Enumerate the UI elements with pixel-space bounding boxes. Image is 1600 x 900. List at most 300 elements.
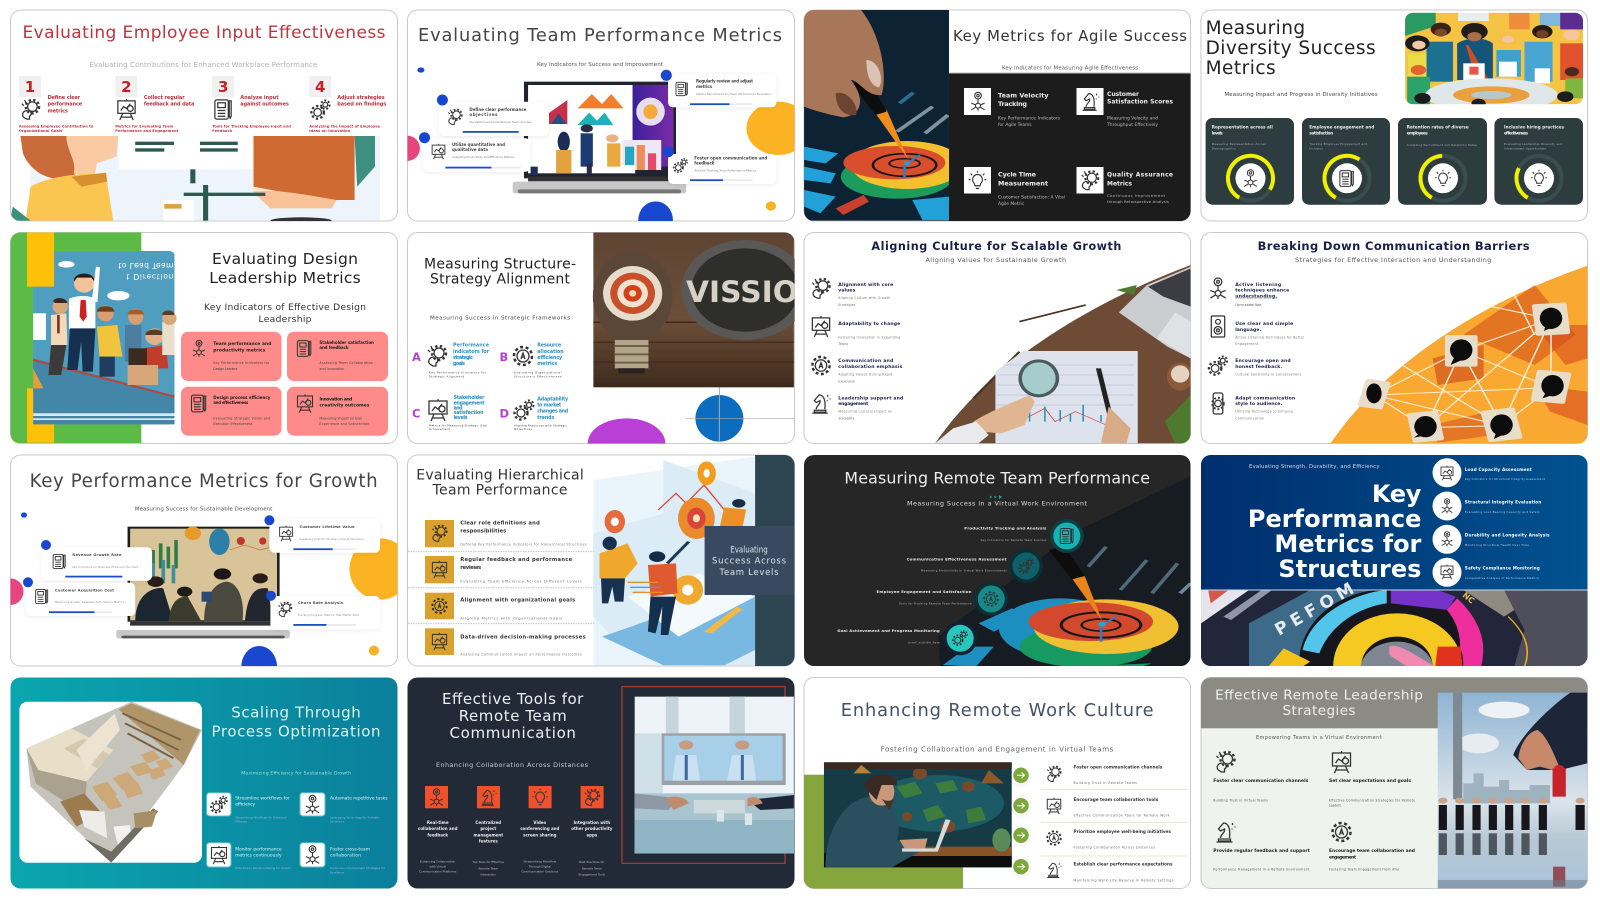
metric card: feedback bbox=[663, 146, 776, 184]
metric: Cycle Time Measurement: Customer Satisfaction: A Vital bbox=[998, 194, 1065, 200]
title bbox=[1248, 480, 1422, 583]
item: monitor bbox=[207, 843, 291, 870]
slide: Evaluating Hierarchical Team Performance bbox=[408, 450, 801, 670]
item: communication channels bbox=[1213, 752, 1309, 802]
KPI card: retention: Analyzing Recruitment and Retention Rates bbox=[1407, 143, 1477, 147]
item C: C bbox=[412, 406, 420, 420]
photo: desk with chart and magnifier, curved mask bbox=[935, 265, 1193, 443]
row: role definitions: Clear role definitions and bbox=[460, 520, 540, 526]
metric card: feedback: Tools for Tracking Team Performance Metrics bbox=[693, 168, 757, 172]
item: adapt style: Communication bbox=[1235, 417, 1264, 421]
metric card: Churn Rate Analysis bbox=[266, 591, 380, 629]
KPI card: representation: levels bbox=[1212, 130, 1223, 135]
item: communication channels: Building Trust in Virtual Teams bbox=[1213, 798, 1268, 802]
row: feedback: Regular feedback and performance bbox=[460, 557, 573, 563]
metric card: review: metrics bbox=[696, 84, 713, 89]
tool: project management: project bbox=[480, 826, 496, 831]
metric card: Customer Lifetime Value: Customer Lifetime Value bbox=[300, 525, 355, 529]
tool: real-time: feedback bbox=[427, 832, 448, 837]
item B: metrics bbox=[537, 361, 557, 367]
item C: Metrics for Measuring Strategic Goal bbox=[429, 423, 487, 427]
item: active listening bbox=[1210, 278, 1289, 307]
subtitle: Measuring Impact and Progress in Diversity Initiatives bbox=[1224, 92, 1378, 98]
tool: integration bbox=[571, 786, 613, 876]
metric card: feedback: Foster open communication and bbox=[694, 155, 767, 160]
metric: communication: Communication Effectiveness Assessment bbox=[907, 556, 1007, 562]
item B: Resource bbox=[537, 342, 562, 348]
item D: Objectives bbox=[514, 427, 533, 431]
metric card: Customer Acquisition Cost: Measuring Growth: Essential Performance Metrics bbox=[55, 600, 125, 604]
card: innovation: Experience and Satisfaction bbox=[319, 422, 369, 426]
item: open feedback: honest feedback. bbox=[1235, 364, 1282, 370]
item: clear language: Active Listening Techniques for Better bbox=[1235, 335, 1305, 339]
step 4: Analyzing the Impact of Employee bbox=[309, 124, 381, 128]
row: data-driven bbox=[425, 628, 586, 656]
green block and photo: man at laptop bbox=[804, 762, 1012, 889]
row: well-being: Fostering Collaboration Across Distances bbox=[1074, 846, 1155, 850]
item: feedback: Performance Management in a Remote Environment bbox=[1213, 868, 1310, 872]
metric card: objectives: objectives bbox=[469, 112, 498, 117]
step 4: Ideas on Innovation bbox=[309, 129, 351, 133]
item B: efficiency bbox=[537, 355, 563, 361]
title bbox=[416, 468, 584, 498]
slide: Effective Remote Leadership Strategies bbox=[1201, 678, 1588, 889]
slide: Measuring Diversity Success Metrics bbox=[1201, 10, 1588, 221]
card: stakeholder satisfaction: and Innovation bbox=[319, 367, 344, 371]
item: core values: Strategies bbox=[838, 303, 856, 307]
item C: satisfaction bbox=[454, 410, 484, 416]
tool: video conferencing: Video bbox=[533, 820, 546, 825]
item C: levels bbox=[454, 415, 468, 421]
tool: video conferencing bbox=[520, 786, 560, 874]
step 1: 1 bbox=[25, 78, 35, 96]
decorative shapes and laptop illustration bbox=[408, 67, 794, 221]
item D bbox=[500, 396, 569, 431]
slide: Aligning Culture for Scalable Growth bbox=[804, 232, 1193, 444]
metric card: objectives: Define clear performance bbox=[469, 107, 527, 112]
tool: project management: Centralized bbox=[475, 820, 501, 825]
callout: team levels: Success Across bbox=[712, 556, 787, 566]
item: adapt style bbox=[1212, 393, 1295, 421]
metric card: Customer Acquisition Cost bbox=[23, 577, 135, 616]
row: alignment bbox=[425, 593, 575, 620]
metric card: data: Utilize quantitative and bbox=[452, 142, 505, 147]
metric: load capacity: Load Capacity Assessment bbox=[1465, 467, 1532, 472]
metric: structural integrity bbox=[1432, 492, 1541, 520]
item: core values: Alignment with core bbox=[838, 282, 893, 288]
item: cross-team: Foster cross-team bbox=[330, 846, 370, 852]
row: communication channels: Foster open communication channels bbox=[1074, 764, 1163, 769]
item: automate bbox=[300, 793, 388, 823]
metric: communication bbox=[907, 549, 1043, 583]
item A: Performance bbox=[453, 342, 490, 348]
metric: durability bbox=[1432, 525, 1550, 554]
item: active listening: Active listening bbox=[1235, 282, 1281, 288]
item: active listening: understanding. bbox=[1235, 293, 1277, 299]
row: well-being: Prioritize employee well-being initiatives bbox=[1074, 829, 1172, 834]
item: communication: collaboration emphasis bbox=[838, 364, 903, 370]
title: Breaking Down Communication Barriers bbox=[1258, 239, 1530, 253]
subtitle: Strategies for Effective Interaction and Understanding bbox=[1295, 256, 1491, 264]
row: performance expectations bbox=[1012, 858, 1174, 882]
title bbox=[1215, 688, 1423, 719]
metric: Customer Satisfaction Scores: Throughput Effectively bbox=[1106, 122, 1158, 128]
metric: goals bbox=[837, 621, 977, 655]
metric: durability: Durability and Longevity Analysis bbox=[1465, 532, 1550, 538]
item: automate: Leveraging Technology for Scalable bbox=[330, 815, 379, 819]
metric: engagement bbox=[876, 582, 1008, 616]
metric: Quality Assurance Metrics: Metrics bbox=[1107, 180, 1132, 187]
item: active listening: Communication Styles bbox=[1235, 303, 1262, 307]
metric: Quality Assurance Metrics bbox=[1076, 167, 1173, 204]
slide: Enhancing Remote Work Culture bbox=[804, 678, 1190, 889]
illustration: employee and document bbox=[10, 136, 380, 224]
step 3: Feedback bbox=[212, 129, 233, 133]
row: well-being bbox=[1012, 827, 1172, 850]
card: innovation: Measuring Impact on User bbox=[319, 416, 363, 420]
title: Performance bbox=[1248, 505, 1421, 533]
KPI card: representation: Representation across all bbox=[1212, 124, 1273, 129]
subtitle: Fostering Collaboration and Engagement in Virtual Teams bbox=[881, 744, 1114, 754]
header band and photo: hand moving figure bbox=[1201, 678, 1588, 889]
tool: video conferencing: conferencing and bbox=[520, 826, 560, 831]
metric card: objectives bbox=[437, 94, 549, 136]
metric: structural integrity: Structural Integrity Evaluation bbox=[1465, 500, 1541, 504]
metric: productivity bbox=[964, 519, 1084, 553]
photo: video conference room with red frame bbox=[622, 687, 794, 863]
item A bbox=[412, 342, 490, 378]
item A: goals bbox=[453, 361, 465, 367]
subtitle: Enhancing Collaboration Across Distances bbox=[436, 761, 589, 769]
carousel marks bbox=[990, 495, 1002, 499]
KPI card: engagement: satisfaction bbox=[1309, 130, 1333, 135]
item: active listening: Understanding Diverse bbox=[1235, 296, 1277, 300]
step 2: feedback and data bbox=[144, 102, 194, 108]
subtitle: Leadership bbox=[258, 314, 312, 325]
tool: project management bbox=[472, 786, 504, 876]
item: expectations: Set clear expectations and goals bbox=[1329, 778, 1411, 784]
image: warehouse isometric bbox=[19, 702, 202, 863]
metric card: data bbox=[419, 132, 530, 172]
card: innovation bbox=[287, 387, 388, 436]
row: collaboration tools: Encourage team collaboration tools bbox=[1074, 797, 1159, 802]
item D: Aligning Resources with Strategic bbox=[514, 423, 567, 427]
tool: real-time: Real-time bbox=[427, 820, 449, 825]
slide: Evaluating Employee Input Effectiveness bbox=[10, 10, 397, 224]
metric: Team Velocity Tracking: Tracking bbox=[998, 100, 1027, 108]
item: core values bbox=[812, 279, 893, 307]
KPI card: engagement: Inclusion bbox=[1309, 146, 1323, 150]
item: cross-team bbox=[300, 843, 386, 874]
step 3 bbox=[212, 76, 291, 133]
mirrored poster text bbox=[118, 263, 173, 280]
title: Key Metrics for Agile Success bbox=[953, 28, 1187, 45]
metric: durability: Monitoring Structural Health Over Time bbox=[1465, 543, 1529, 547]
row: feedback bbox=[425, 556, 582, 584]
KPI card: retention: employees bbox=[1407, 130, 1428, 135]
metric: Team Velocity Tracking bbox=[964, 88, 1061, 128]
callout: team levels bbox=[712, 545, 787, 578]
KPI card: engagement: Tracking Employee Engagement and bbox=[1308, 142, 1367, 146]
metric card: Customer Acquisition Cost: Customer Acquisition Cost bbox=[55, 588, 114, 592]
title bbox=[1206, 18, 1376, 79]
title: Team Performance bbox=[432, 482, 568, 498]
slide: Measuring Structure-Strategy Alignment bbox=[407, 232, 795, 444]
metric: Team Velocity Tracking: for Agile Teams bbox=[998, 122, 1032, 128]
metric: productivity: Productivity Tracking and Analysis bbox=[964, 526, 1047, 530]
card: stakeholder satisfaction: Stakeholder satisfaction bbox=[319, 340, 374, 345]
item: cross-team: Continuous Improvement Strategies for bbox=[330, 866, 386, 870]
item: core values: Aligning Culture with Growth bbox=[838, 296, 890, 300]
slide: Scaling Through Process Optimization bbox=[10, 678, 398, 888]
title: Strategy Alignment bbox=[430, 272, 570, 288]
item: clear language: Use clear and simple bbox=[1235, 321, 1293, 327]
item: leadership: engagement bbox=[838, 401, 869, 407]
item A: Key Performance Indicators for bbox=[429, 370, 487, 374]
decorative shapes and laptop photo bbox=[10, 512, 398, 666]
row: role definitions bbox=[425, 520, 587, 547]
card: stakeholder satisfaction bbox=[287, 332, 388, 381]
row: communication channels bbox=[1012, 764, 1163, 785]
metric card: review: Regularly review and adjust bbox=[696, 78, 753, 84]
metric: Customer Satisfaction Scores: Satisfaction Scores bbox=[1107, 98, 1173, 106]
item C: Achievement bbox=[429, 427, 451, 431]
photo: dart target and pen, dark diagonal bbox=[938, 476, 1191, 670]
tool: real-time: with Virtual bbox=[429, 864, 446, 868]
step 3: 3 bbox=[218, 78, 228, 96]
step 1: performance bbox=[48, 102, 83, 108]
KPI card: hiring: Advancement Opportunities bbox=[1504, 146, 1546, 150]
row: feedback: Evaluating Team Efficiency Across Different Levels bbox=[460, 579, 582, 584]
metric: engagement: Employee Engagement and Satisfaction bbox=[876, 589, 972, 594]
item: communication bbox=[812, 357, 903, 384]
item: leadership: Leadership support and bbox=[838, 395, 903, 401]
photo: target light bulb and VISSION sign; decorative circles bbox=[588, 232, 794, 444]
card: team performance: productivity metrics bbox=[213, 347, 266, 353]
title bbox=[424, 256, 576, 288]
item: communication: Expansion bbox=[838, 380, 855, 384]
slide: Evaluating Design Leadership Metrics bbox=[10, 232, 397, 444]
metric: Cycle Time Measurement: Cycle Time bbox=[998, 170, 1037, 178]
title bbox=[212, 704, 380, 740]
item B bbox=[500, 342, 564, 378]
item: adaptability: Adaptability to change bbox=[838, 321, 900, 327]
item D: D bbox=[500, 406, 509, 420]
step 1 bbox=[19, 76, 94, 133]
item: automate: Solutions bbox=[330, 819, 345, 823]
KPI card: representation: Measuring Representation Across bbox=[1212, 142, 1266, 146]
KPI card: hiring: effectiveness bbox=[1504, 130, 1528, 135]
tool: video conferencing: Communication Solutions bbox=[521, 870, 559, 874]
step 4: 4 bbox=[315, 78, 325, 96]
card: innovation: creativity outcomes bbox=[319, 402, 370, 408]
metric card: Customer Lifetime Value bbox=[264, 515, 380, 553]
card: design process: Execution Effectiveness bbox=[213, 422, 253, 426]
item A: indicators for bbox=[453, 349, 490, 355]
slide: Key Metrics for Agile Success bbox=[804, 10, 1191, 222]
step 4 bbox=[309, 76, 386, 133]
subtitle: Aligning Values for Sustainable Growth bbox=[926, 256, 1066, 264]
subtitle: Measuring Success in Strategic Frameworks bbox=[430, 316, 570, 322]
item: feedback: Provide regular feedback and support bbox=[1213, 848, 1311, 854]
card: innovation: Innovation and bbox=[319, 396, 352, 402]
item: streamline: Streamline workflows for bbox=[235, 796, 290, 802]
title bbox=[442, 690, 584, 742]
item D: Adaptability bbox=[537, 396, 569, 402]
item: expectations: Leaders bbox=[1329, 804, 1341, 808]
item: collaboration: Fostering Team Engagement from Afar bbox=[1329, 868, 1400, 872]
item: communication: Communication and bbox=[838, 358, 893, 364]
row: role definitions: Defining Key Performance Indicators for Hierarchical Structures bbox=[460, 542, 587, 546]
item: communication: Adapting Values During Rapid bbox=[838, 373, 892, 377]
item: adapt style: style to audience. bbox=[1235, 401, 1282, 407]
item: streamline: Efficiency bbox=[235, 819, 248, 823]
step 2: 2 bbox=[121, 78, 132, 96]
card: design process: Design process efficiency bbox=[213, 395, 271, 400]
metric: communication: Measuring Productivity in Virtual Work Environments bbox=[921, 569, 1007, 573]
item: open feedback: Cultural Sensitivity in Conversations bbox=[1235, 373, 1302, 377]
item: streamline bbox=[207, 793, 290, 823]
mirrored poster text: to Lead Team bbox=[118, 261, 173, 270]
tool: integration: Engagement Tools bbox=[579, 872, 606, 876]
metric card: Churn Rate Analysis: Churn Rate Analysis bbox=[298, 601, 343, 605]
card: stakeholder satisfaction: Assessing Team Collaboration bbox=[319, 361, 373, 365]
step 1: Organizational Goals bbox=[19, 129, 62, 133]
metric card: Revenue Growth Rate bbox=[41, 540, 152, 581]
item: expectations: Effective Communication Strategies for Remote bbox=[1329, 798, 1415, 802]
subtitle: Measuring Success in a Virtual Work Environment bbox=[907, 500, 1087, 508]
item: open feedback: Encourage open and bbox=[1235, 358, 1291, 364]
tool: video conferencing: screen sharing bbox=[523, 832, 557, 837]
item C: and bbox=[454, 405, 463, 411]
metric card: Revenue Growth Rate: Key Indicators for Business Expansion Success bbox=[72, 565, 139, 569]
item: streamline: Streamlining Workflows for Enhanced bbox=[235, 815, 287, 819]
metric: load capacity: Key Indicators for Structural Integrity Assessment bbox=[1465, 477, 1546, 481]
item C: engagement bbox=[454, 400, 485, 406]
gauge photo and blue panel: PEFOM bbox=[1272, 579, 1358, 640]
subtitle: Empowering Teams in a Virtual Environment bbox=[1256, 735, 1382, 741]
callout: team levels: Team Levels bbox=[718, 568, 779, 578]
step 4: Adjust strategies bbox=[337, 95, 385, 101]
row: alignment: Aligning Metrics with Organizational Goals bbox=[460, 615, 562, 620]
title: Measuring bbox=[1206, 18, 1305, 39]
card: design process: and effectiveness bbox=[213, 400, 249, 405]
metric: Quality Assurance Metrics: through Retrospective Analysis bbox=[1107, 199, 1169, 204]
item B: B bbox=[500, 350, 508, 364]
metric: Team Velocity Tracking: Key Performance Indicators bbox=[998, 116, 1061, 122]
row separators bbox=[408, 552, 594, 624]
row: role definitions: responsibilities bbox=[460, 528, 506, 534]
item: streamline: efficiency bbox=[235, 802, 256, 808]
item: automate: Automate repetitive tasks bbox=[330, 796, 388, 802]
subtitle: Key Indicators for Measuring Agile Effectiveness bbox=[1002, 66, 1138, 72]
title: Evaluating Team Performance Metrics bbox=[418, 25, 782, 46]
item: expectations bbox=[1329, 751, 1415, 808]
KPI card: engagement: Employee engagement and bbox=[1309, 124, 1374, 129]
item B: allocation bbox=[537, 349, 564, 355]
step 2 bbox=[115, 76, 194, 133]
metric: safety: Safety Compliance Monitoring bbox=[1465, 566, 1540, 570]
row: performance expectations: Maintaining Work-Life Balance in Remote Settings bbox=[1074, 878, 1174, 882]
tool: project management: management bbox=[473, 832, 503, 837]
row: collaboration tools bbox=[1012, 797, 1170, 817]
item: clear language: language. bbox=[1235, 327, 1261, 333]
step 3: against outcomes bbox=[240, 102, 289, 108]
title: Aligning Culture for Scalable Growth bbox=[871, 240, 1121, 253]
card: design process bbox=[181, 387, 282, 436]
row: data-driven: Analyzing Communication Impact on Performance Outcomes bbox=[460, 652, 582, 656]
metric: safety bbox=[1432, 558, 1540, 587]
KPI card: hiring: Evaluating Leadership Diversity and bbox=[1504, 142, 1562, 146]
metric card: data: qualitative data bbox=[452, 147, 488, 152]
step 1: Define clear bbox=[48, 95, 81, 101]
title bbox=[209, 250, 361, 287]
step 3: Analyze input bbox=[240, 95, 279, 101]
item: clear language bbox=[1211, 316, 1305, 346]
tool: real-time bbox=[418, 786, 458, 874]
KPI card: retention: Retention rates of diverse bbox=[1407, 124, 1469, 129]
tool: video conferencing: Through Digital bbox=[528, 864, 551, 868]
row: feedback: reviews bbox=[460, 565, 481, 571]
item: monitor: metrics continuously bbox=[235, 853, 282, 859]
title: Evaluating Employee Input Effectiveness bbox=[22, 23, 386, 43]
subtitle: Evaluating Strength, Durability, and Efficiency bbox=[1249, 464, 1380, 470]
tool: real-time: collaboration and bbox=[418, 826, 458, 831]
card: team performance bbox=[181, 332, 282, 381]
card: design process: Evaluating Strategic Vision and bbox=[213, 416, 270, 420]
title: Metrics bbox=[1206, 58, 1276, 79]
item: collaboration bbox=[1329, 823, 1415, 872]
KPI card: engagement bbox=[1302, 118, 1390, 209]
item: monitor: Data-Driven Decision Making for Growth bbox=[235, 866, 291, 870]
title: Key bbox=[1372, 480, 1422, 508]
title: Remote Team bbox=[459, 707, 567, 725]
metric: productivity: Key Indicators for Remote Team Success bbox=[981, 538, 1047, 542]
item: adaptability: Teams bbox=[837, 342, 849, 346]
illustration: analysts with charts bbox=[593, 450, 801, 670]
subtitle: Evaluating Contributions for Enhanced Workplace Performance bbox=[89, 61, 317, 69]
step 1: Assessing Employee Contribution to bbox=[19, 124, 94, 128]
subtitle: Key Indicators of Effective Design bbox=[204, 302, 366, 313]
title: Scaling Through bbox=[231, 704, 361, 722]
metric card: review bbox=[661, 70, 776, 107]
metric: goals: Goal Achievement and Progress Monitoring bbox=[837, 628, 940, 633]
step 2: Metrics for Evaluating Team bbox=[115, 124, 174, 128]
title: Communication bbox=[449, 724, 576, 742]
item: cross-team: Excellence bbox=[330, 870, 344, 874]
card: team performance: Design Leaders bbox=[213, 367, 238, 371]
item C: Stakeholder bbox=[454, 395, 485, 401]
tool: integration: Integration with bbox=[574, 820, 610, 825]
metric card: Revenue Growth Rate: Revenue Growth Rate bbox=[72, 553, 122, 557]
tool: real-time: Enhancing Collaboration bbox=[420, 860, 456, 864]
item: adapt style: Utilizing Technology to Enhance bbox=[1235, 410, 1293, 414]
item: collaboration: engagement bbox=[1329, 854, 1357, 860]
slide: Breaking Down Communication Barriers bbox=[1201, 232, 1588, 444]
subtitle: Measuring Success for Sustainable Development bbox=[135, 507, 273, 513]
item: leadership bbox=[812, 395, 903, 421]
metric: engagement: Tools for Tracking Remote Team Performance bbox=[898, 601, 972, 605]
title: Enhancing Remote Work Culture bbox=[841, 700, 1154, 721]
metric card: Churn Rate Analysis: Tracking Progress: Metrics That Matter Most bbox=[298, 613, 359, 617]
row: data-driven: Data-driven decision-making processes bbox=[460, 634, 586, 640]
title: Metrics for bbox=[1274, 530, 1422, 558]
title: Evaluating Hierarchical bbox=[416, 468, 584, 484]
card: team performance: Key Performance Indicators for bbox=[213, 361, 270, 365]
KPI card: hiring: Inclusive hiring practices bbox=[1504, 124, 1564, 129]
item: cross-team: collaboration bbox=[330, 853, 361, 859]
item D: to market bbox=[537, 402, 562, 408]
